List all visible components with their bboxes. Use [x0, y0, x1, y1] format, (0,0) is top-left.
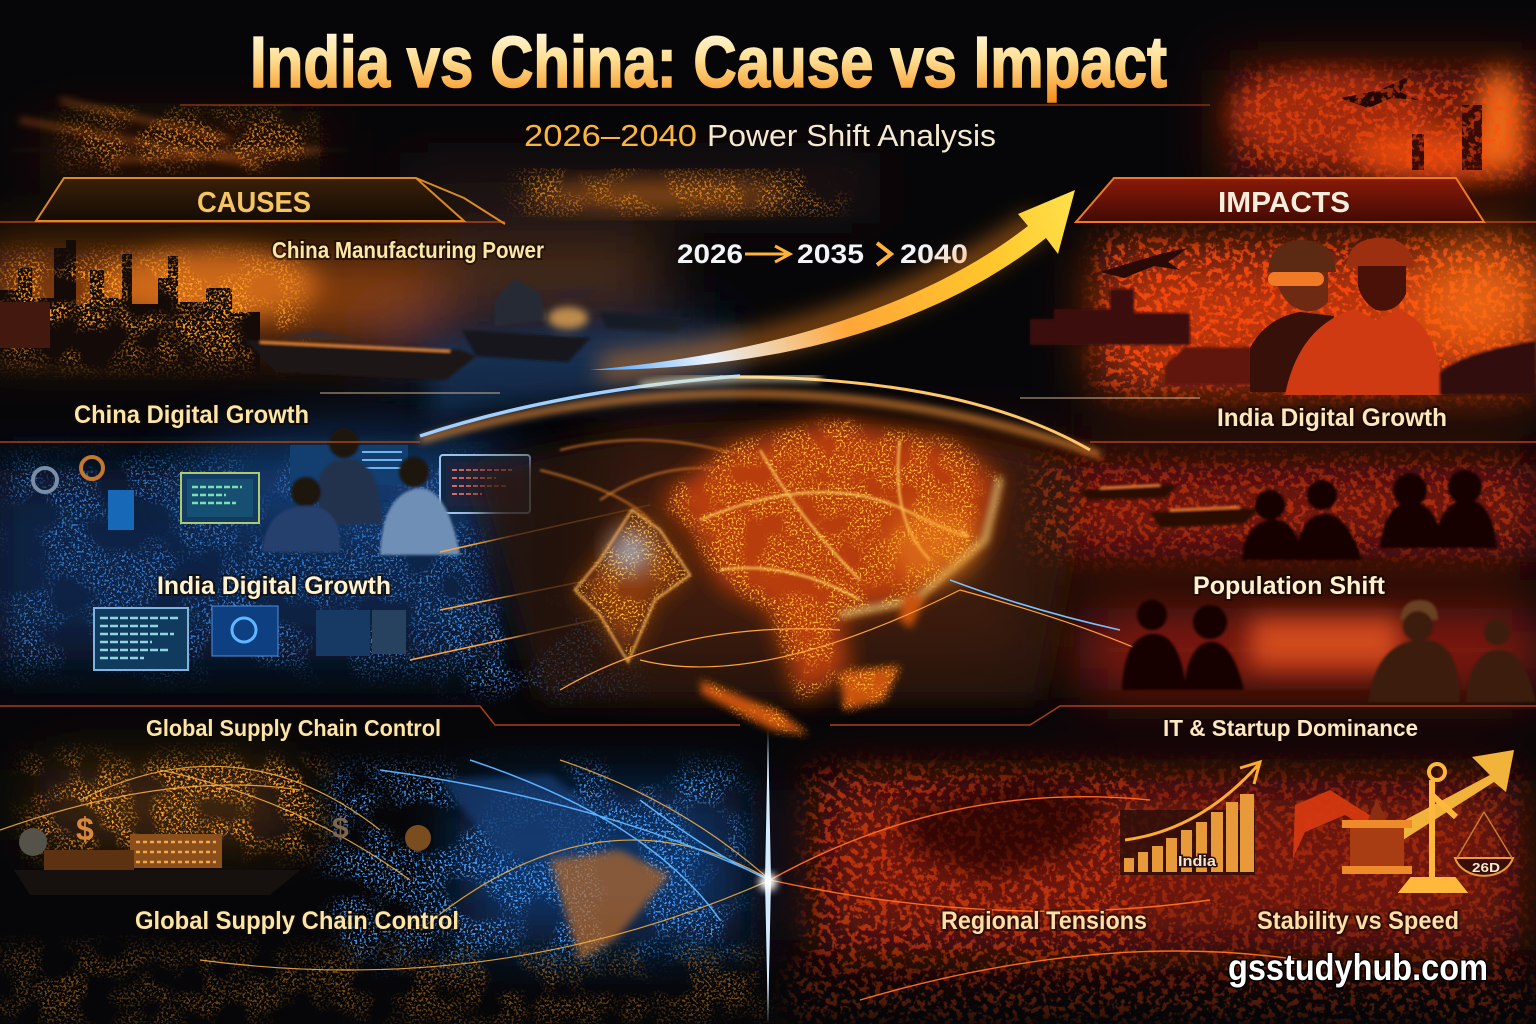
- top-right smoke and fire: [1230, 70, 1530, 179]
- top-left distant city streaks: [20, 100, 320, 165]
- soldier left: [1250, 240, 1336, 392]
- soldier right: [1285, 238, 1443, 395]
- label: Population Shift: Population Shift: [1193, 572, 1386, 600]
- timeline 2026 to 2040: 2026: [677, 239, 743, 269]
- label: China Manufacturing Power: China Manufacturing Power: [272, 237, 544, 263]
- title underline: [180, 104, 1210, 106]
- timeline 2026 to 2040: 2040: [900, 239, 968, 269]
- mid-horizon lights: [520, 175, 840, 210]
- routes: [0, 760, 770, 970]
- central glowing Asia map: [420, 393, 1140, 734]
- India landmass: [575, 510, 690, 662]
- jets: [1100, 248, 1188, 278]
- cargo ship and coins: [14, 811, 431, 895]
- banner: causes: [36, 178, 505, 224]
- skyline: [0, 240, 300, 382]
- panel: causes row one, China manufacturing: [0, 240, 740, 420]
- flare at map centre: [700, 730, 840, 1024]
- timeline 2026 to 2040: [677, 239, 968, 269]
- panel: causes digital, China and India tech workers: [10, 428, 650, 690]
- title: India vs China: Cause vs Impact: [250, 23, 1167, 103]
- crowd along the right edge: [1440, 341, 1536, 395]
- subtitle: Power Shift Analysis: [707, 118, 996, 153]
- panel: causes world network map: [0, 760, 770, 1024]
- panel: impacts row one, military: [1030, 238, 1536, 395]
- pan with value: [1455, 858, 1513, 876]
- banner: impacts: IMPACTS: [1218, 187, 1350, 219]
- subtitle: 2026–2040: [524, 118, 697, 153]
- northern Asia network: [540, 420, 850, 520]
- balance: [1404, 780, 1462, 890]
- icon: rising arrow and scales: [1293, 750, 1514, 890]
- label: Global Supply Chain Control, upper: Global Supply Chain Control: [146, 715, 441, 741]
- spool: [1350, 826, 1404, 868]
- label: Global Supply Chain Control, lower: Global Supply Chain Control: [135, 907, 459, 935]
- continents: [440, 775, 600, 865]
- subtitle: [524, 118, 996, 153]
- icon: rising arrow and scales: 26D: [1472, 860, 1500, 875]
- timeline 2026 to 2040: 2035: [797, 239, 864, 269]
- label: India Digital Growth, causes: India Digital Growth: [157, 572, 391, 600]
- website credit: gsstudyhub.com: [1228, 947, 1488, 988]
- workers: [262, 428, 460, 555]
- buildings: [1030, 289, 1190, 345]
- container stacks: [0, 302, 50, 348]
- label: Regional Tensions: Regional Tensions: [941, 907, 1147, 935]
- growth arrow: [420, 190, 1090, 450]
- panel: impacts row two, fleet and crowd: [1030, 460, 1530, 560]
- islands and southern sea: [560, 580, 1140, 734]
- ship flotilla: [245, 278, 692, 380]
- vehicle: [1165, 347, 1255, 385]
- chart: India growth bars: [1120, 762, 1260, 875]
- label: Stability vs Speed: Stability vs Speed: [1257, 907, 1459, 935]
- banner: impacts: [1076, 178, 1484, 222]
- label: China Digital Growth: China Digital Growth: [74, 401, 309, 429]
- frame lines: [0, 222, 1536, 725]
- chart: India growth bars: India: [1178, 853, 1217, 870]
- data stream: [410, 505, 650, 660]
- panel: impacts row three, leaders and soldiers: [1122, 600, 1536, 702]
- label: IT and Startup Dominance: IT & Startup Dominance: [1163, 715, 1418, 741]
- China landmass: [660, 420, 1000, 700]
- label: India Digital Growth, impacts: India Digital Growth: [1217, 404, 1447, 432]
- globe horizon: [420, 393, 1100, 455]
- monitors: [33, 445, 530, 670]
- sea: [430, 327, 740, 420]
- banner: causes: CAUSES: [197, 187, 311, 219]
- panel: impacts regional map: [770, 770, 1530, 1020]
- cargo ship and coins: $: [332, 812, 349, 845]
- cargo ship and coins: $: [76, 811, 94, 847]
